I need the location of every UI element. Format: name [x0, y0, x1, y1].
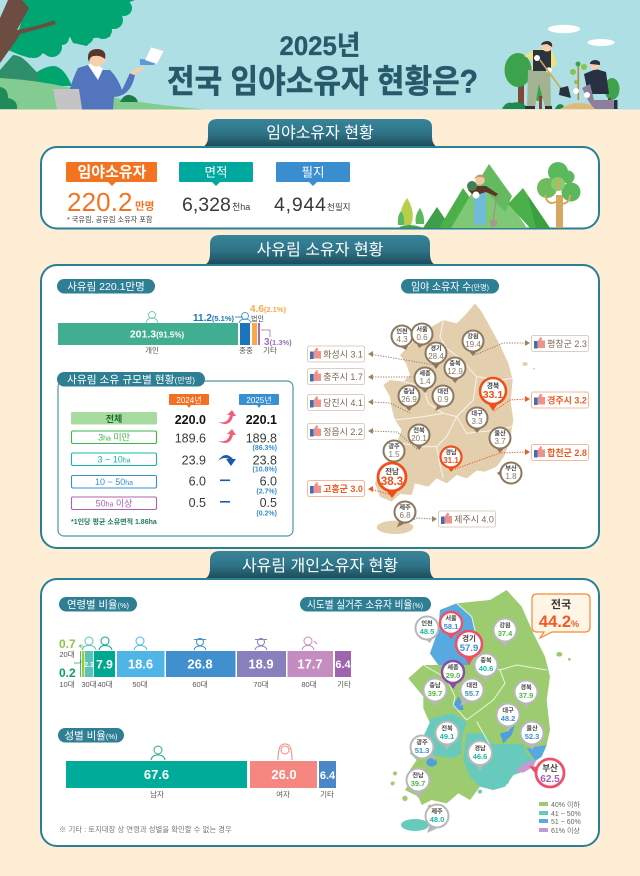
row: 50ha 이상: (0.2%): [256, 510, 277, 518]
pill: 사유림 소유 규모별 현황: 사유림 소유 규모별 현황 (만명): [67, 374, 195, 386]
pin: 광주 51.3: 광주: [416, 738, 428, 746]
bar chart: 연령별 비율: 18.6: [128, 656, 153, 672]
row: 10~50ha: [72, 474, 277, 496]
pin: 울산 52.3: [520, 722, 544, 750]
pin: 제주 48.0: [426, 804, 448, 833]
stacked bar: 사유림 소유자 구성: 4.6(2.1%): [250, 304, 286, 315]
stacked bar: 사유림 소유자 구성: 11.2(5.1%): [193, 313, 235, 324]
pin: 대전: [432, 386, 454, 411]
callout: 평창군 2.3: [532, 336, 588, 352]
row: 전체: 전체: [106, 413, 122, 424]
bar chart: 성별 비율: 여자: [276, 789, 290, 799]
bar chart: 성별 비율: 남자: [150, 790, 164, 799]
callout: 충주시 1.7: [308, 368, 364, 384]
pill: 연령별 비율: [59, 597, 137, 612]
section tab: 사유림 개인소유자 현황: 사유림 개인소유자 현황: [242, 557, 398, 575]
pin: 충북: [444, 358, 466, 383]
pin: 경북: 경북: [487, 381, 499, 390]
pin: 제주: [394, 502, 416, 527]
section tab: 임야소유자 현황: [203, 119, 437, 147]
icon: male: [151, 746, 165, 760]
callout: 고흥군 3.0: 고흥군 3.0: [323, 483, 363, 494]
pin: 세종: 세종: [419, 370, 431, 378]
note: 1인당 평균 소유면적: *1인당 평균 소유면적 1.86ha: [71, 517, 157, 526]
stat: 220.2만명: * 국유림, 공유림 소유자 포함: [67, 215, 153, 224]
bar chart: 연령별 비율: 6.4: [335, 659, 352, 671]
stat: 220.2만명: [67, 187, 154, 224]
pin: 울산 52.3: 52.3: [525, 732, 539, 741]
connector lines: [370, 343, 526, 527]
row: 전체: [71, 410, 277, 427]
header banner: [0, 0, 640, 110]
bar chart: 연령별 비율: 80대: [301, 680, 317, 689]
pin: 광주: 광주: [388, 442, 400, 450]
illustration: mountains and forester: [398, 162, 580, 228]
pin: 경북: 33.1: [483, 389, 503, 401]
pin: 충남 39.7: 39.7: [428, 689, 442, 698]
bar chart: 연령별 비율: 30대: [81, 680, 97, 689]
bar chart: 연령별 비율: 60대: [192, 680, 208, 689]
tag: 임야소유자: [66, 162, 157, 186]
tag: 면적: [179, 162, 253, 186]
pill: 성별 비율: 성별 비율(%): [64, 730, 118, 742]
stat: 4,944천필지: [274, 194, 350, 216]
icon: person 종중: [239, 312, 251, 323]
pill: 시도별 실거주 소유자 비율: 시도별 실거주 소유자 비율(%): [307, 599, 423, 611]
pin: 광주 51.3: 51.3: [415, 746, 429, 755]
stat: 220.2만명: 220.2: [67, 187, 132, 217]
pin: 충북 40.6: 충북: [480, 656, 492, 664]
pin: 충남: 충남: [403, 388, 415, 396]
pin: 전남 39.7: 전남: [412, 772, 424, 780]
pin: 충남 39.7: [424, 678, 446, 707]
illustration: tree planting people: [502, 25, 620, 109]
illustration: left hills and tree: [0, 0, 205, 110]
bar chart: 연령별 비율: 10대: [59, 680, 75, 689]
callout: 전국 44.2%: [532, 594, 590, 638]
bar chart: 연령별 비율: 2.3: [84, 662, 94, 669]
pin: 충북 40.6: [474, 654, 498, 682]
row: 3ha 미만: [72, 429, 277, 452]
pin: 경남 46.6: 46.6: [473, 752, 487, 761]
connector arrowheads: [368, 340, 530, 522]
tag: 면적: 면적: [204, 166, 228, 180]
callout: 제주시 4.0: 제주시 4.0: [454, 514, 494, 524]
row: 3~10ha: (10.8%): [252, 466, 277, 474]
pin: 부산 62.5: 62.5: [540, 774, 560, 785]
pin: 경기: 경기: [430, 344, 442, 352]
pin: 충남: [398, 386, 420, 411]
panel: 임야소유자 현황: [41, 147, 599, 228]
pin: 강원: [462, 330, 484, 356]
pin: 서울: 0.6: [416, 333, 428, 342]
pin: 전북: 20.1: [411, 434, 427, 443]
title: [167, 31, 478, 100]
row: 3ha 미만: 3ha 미만: [98, 432, 130, 442]
bar chart: 성별 비율: 26.0: [271, 767, 297, 782]
pin: 경기 57.9: [456, 631, 482, 665]
pin: 광주 51.3: [410, 736, 436, 761]
pin: 강원 37.4: 37.4: [498, 629, 513, 638]
pin: 경남: 31.1: [443, 456, 459, 465]
pin: 전북 49.1: 49.1: [440, 732, 454, 741]
stacked bar: 사유림 소유자 구성: 개인: [145, 345, 159, 355]
bar chart: 성별 비율: 기타: [320, 790, 334, 799]
row: 10~50ha: (2.7%): [256, 488, 277, 496]
table: 소유 규모별 현황: 2025년: [246, 395, 272, 405]
icon: person 개인: [146, 312, 158, 323]
pill: 사유림 220.1만명: 사유림 220.1만명: [67, 281, 145, 293]
pin: 대구 48.2: 48.2: [501, 714, 515, 723]
callout: 당진시 4.1: [308, 394, 364, 410]
pin: 전북 49.1: 전북: [441, 724, 453, 732]
pin: 제주 48.0: 48.0: [430, 815, 444, 824]
pin: 울산: 울산: [494, 430, 506, 438]
pin: 울산: [490, 428, 510, 453]
callout: 전국 44.2%: 44.2%: [539, 613, 579, 631]
row: 3~10ha: 23.8: [253, 454, 277, 468]
callout: 충주시 1.7: 충주시 1.7: [323, 372, 363, 382]
pin: 인천: [392, 326, 412, 350]
bar chart: 연령별 비율: [59, 637, 352, 689]
pin: 서울 58.1: 서울: [445, 614, 457, 622]
bar chart: 연령별 비율: 7.9: [96, 658, 113, 672]
pin: 제주: 제주: [399, 504, 411, 512]
pill: 임야 소유자 수: 임야 소유자 수(만명): [411, 280, 489, 293]
callout: 정읍시 2.2: 정읍시 2.2: [323, 427, 363, 437]
pin: 대구: [466, 408, 488, 433]
pin: 경남: [440, 446, 462, 472]
pin: 경남: 경남: [445, 448, 457, 456]
legend: 비율 구간: 40% 이하: [551, 800, 580, 809]
panel: 사유림 개인소유자 현황: [41, 579, 599, 846]
section tab: 임야소유자 현황: 임야소유자 현황: [266, 124, 374, 142]
pin: 세종: [414, 368, 436, 393]
pin: 충북: 12.9: [447, 367, 463, 376]
legend: 비율 구간: [539, 800, 581, 835]
pin: 세종 29.0: 29.0: [446, 671, 460, 680]
title: 2025년: [280, 31, 360, 61]
row: 3~10ha: 23.9: [182, 454, 206, 468]
section tab: 사유림 소유자 현황: [205, 235, 435, 265]
pin: 서울: 서울: [416, 326, 428, 334]
pin: 전북: 전북: [413, 426, 425, 434]
pin: 대전 55.7: 대전: [466, 682, 478, 690]
illustration: man with document and laptop: [53, 47, 164, 110]
pin: 광주: [384, 440, 404, 462]
bar chart: 성별 비율: 6.4: [320, 770, 336, 782]
bar chart: 연령별 비율: 17.7: [297, 656, 323, 672]
callout: 화성시 3.1: 화성시 3.1: [323, 350, 363, 360]
stacked bar: 사유림 소유자 구성: 3(1.3%): [264, 337, 292, 348]
bar chart: 연령별 비율: 0.2: [59, 666, 76, 680]
bar chart: 연령별 비율: 18.9: [248, 656, 274, 672]
pin: 인천: 4.3: [396, 335, 408, 344]
callout: 화성시 3.1: [308, 346, 364, 362]
callout: 경주시 3.2: [532, 392, 588, 408]
pin: 대구: 대구: [471, 410, 483, 418]
pin: 부산 62.5: 부산: [542, 763, 558, 773]
stat: 6,328천ha: 천ha: [232, 202, 250, 212]
pin: 경북: [480, 378, 506, 411]
pin: 인천: 인천: [396, 328, 408, 336]
pin: 경남 46.6: 경남: [474, 744, 486, 752]
note: 기타 설명: ※ 기타 : 토지대장 상 연령과 성별을 확인할 수 없는 경우: [59, 825, 232, 834]
pin: 서울 58.1: [440, 612, 462, 639]
row: 50ha 이상: 0.5: [260, 496, 277, 510]
pill: 사유림 220.1만명: [57, 279, 155, 294]
pin: 서울 58.1: 58.1: [444, 622, 458, 631]
row: 10~50ha: 10 ~ 50ha: [95, 477, 133, 487]
pin: 대전: 0.9: [437, 395, 449, 404]
callout: 경주시 3.2: 경주시 3.2: [547, 394, 587, 406]
pin: 강원 37.4: 강원: [499, 622, 511, 630]
pin: 서울: [412, 324, 432, 348]
bar chart: 연령별 비율: 70대: [253, 680, 269, 689]
pin: 전남 39.7: 39.7: [411, 779, 425, 788]
callout: 합천군 2.8: 합천군 2.8: [547, 447, 587, 458]
pin: 인천 48.5: [416, 616, 438, 643]
section tab: 사유림 개인소유자 현황: [205, 551, 435, 579]
pill: 사유림 소유 규모별 현황: [57, 372, 293, 536]
row: 10~50ha: 6.0: [189, 474, 206, 488]
pin: 대구 48.2: [496, 704, 520, 732]
bar chart: 연령별 비율: 40대: [97, 680, 113, 689]
bar chart: 연령별 비율: 50대: [132, 680, 148, 689]
stacked bar: 사유림 소유자 구성: 종중: [239, 346, 253, 355]
pin: 부산: [497, 462, 522, 484]
tag: 필지: [276, 162, 350, 186]
callout: 전국 44.2%: 전국: [551, 598, 571, 611]
pin: 강원: 19.4: [465, 340, 481, 349]
bar chart: 연령별 비율: 0.7: [59, 637, 76, 651]
row: 50ha 이상: 0.5: [189, 496, 206, 510]
pin: 강원: 강원: [467, 332, 479, 340]
legend: 비율 구간: 41 ~ 50%: [551, 811, 581, 818]
table: 소유 규모별 현황: [71, 394, 279, 526]
pin: 부산: 부산: [505, 464, 517, 472]
tag: 필지: 필지: [301, 166, 325, 180]
pin: 충남 39.7: 충남: [429, 682, 441, 690]
pin: 대전: 대전: [437, 388, 449, 396]
pill: 임야 소유자 수: [401, 279, 499, 294]
stacked bar: 사유림 소유자 구성: 법인: [251, 314, 264, 323]
pin: 광주: 1.5: [388, 450, 400, 459]
callout: 제주시 4.0: [438, 511, 496, 527]
row: 50ha 이상: 50ha 이상: [96, 498, 132, 508]
pin: 전남: 전남: [385, 466, 399, 476]
pin: 전남 39.7: [406, 768, 430, 798]
title: 전국 임야소유자 현황은?: [167, 64, 478, 100]
pin: 강원 37.4: [494, 618, 516, 648]
pin: 제주 48.0: 제주: [431, 808, 443, 816]
pill: 성별 비율: [58, 728, 124, 742]
section tab: 사유림 소유자 현황: 사유림 소유자 현황: [257, 241, 384, 259]
row: 3ha 미만: (86.3%): [252, 445, 277, 452]
pin: 경기: [426, 342, 446, 369]
table: 소유 규모별 현황: 2024년: [176, 395, 202, 405]
row: 전체: 220.0: [175, 413, 206, 427]
stacked bar: 사유림 소유자 구성: 기타: [263, 346, 277, 355]
stat: 6,328천ha: 6,328: [182, 194, 231, 216]
row: 3ha 미만: 189.8: [246, 432, 277, 446]
callout: 평창군 2.3: 평창군 2.3: [547, 339, 587, 349]
bar chart: 성별 비율: 67.6: [144, 767, 169, 782]
bar chart: 성별 비율: [66, 761, 336, 799]
pin: 충북: 충북: [449, 360, 461, 368]
row: 전체: 220.1: [246, 413, 277, 427]
pin: 충남: 26.9: [401, 395, 417, 404]
pin: 전북: [408, 424, 430, 450]
row: 3~10ha: [72, 453, 277, 474]
callout: 고흥군 3.0: [308, 480, 364, 496]
pin: 전북 49.1: [436, 722, 458, 750]
icon: female: [278, 744, 292, 760]
pin: 대구: 3.3: [471, 417, 483, 426]
pin: 인천 48.5: 인천: [421, 620, 433, 628]
pin: 경남 46.6: [468, 741, 492, 771]
callout: 합천군 2.8: [532, 444, 588, 460]
pin: 경기 57.9: 경기: [462, 633, 476, 643]
pin: 부산 62.5: [529, 759, 564, 787]
row: 3~10ha: 3 ~ 10ha: [97, 454, 131, 464]
pin: 대전 55.7: [460, 678, 484, 706]
pin: 부산: 1.8: [505, 472, 517, 481]
pin: 경기: 28.4: [428, 352, 444, 361]
row: 3ha 미만: 189.6: [175, 432, 206, 446]
stacked bar: 사유림 소유자 구성: [58, 304, 292, 355]
pin: 인천 48.5: 48.5: [420, 627, 434, 636]
bar chart: 연령별 비율: 기타: [337, 680, 351, 689]
row: 10~50ha: 6.0: [260, 474, 277, 488]
pin: 경기 57.9: 57.9: [460, 643, 478, 654]
map: 시도별 실거주 소유자 비율: [391, 590, 571, 833]
icons: age group people: [82, 637, 317, 650]
stat: 4,944천필지: 천필지: [327, 202, 350, 212]
pin: 전남: [378, 463, 406, 498]
pin: 세종 29.0: 세종: [447, 664, 459, 672]
map: 시도별 임야 소유자 수: [308, 303, 588, 534]
stat: 4,944천필지: 4,944: [274, 194, 326, 216]
pin: 충북 40.6: 40.6: [479, 664, 493, 673]
pin: 울산: 3.7: [494, 437, 506, 446]
stat: 220.2만명: 만명: [135, 200, 154, 212]
pin: 경북 37.9: [514, 680, 538, 709]
pin: 경북 37.9: 경북: [520, 684, 532, 692]
pin: 대구 48.2: 대구: [502, 706, 514, 714]
callout: 당진시 4.1: 당진시 4.1: [323, 398, 363, 408]
legend: 비율 구간: 61% 이상: [551, 826, 580, 835]
pin: 전남: 38.3: [381, 476, 403, 488]
pin: 제주: 6.8: [399, 511, 411, 520]
pin: 경북 37.9: 37.9: [519, 691, 533, 700]
pill: 연령별 비율: 연령별 비율(%): [67, 599, 129, 611]
bar chart: 연령별 비율: 26.8: [187, 656, 213, 672]
tag: 임야소유자: 임야소유자: [77, 164, 147, 181]
row: 50ha 이상: [72, 496, 277, 518]
pin: 대전 55.7: 55.7: [465, 689, 479, 698]
bar chart: 연령별 비율: 20대: [59, 650, 75, 659]
pin: 울산 52.3: 울산: [526, 724, 538, 732]
legend: 비율 구간: 51 ~ 60%: [551, 819, 581, 826]
callout: 정읍시 2.2: [308, 424, 364, 440]
panel: 사유림 소유자 현황: [41, 265, 599, 548]
pin: 세종: 1.4: [419, 377, 431, 386]
stacked bar: 사유림 소유자 구성: 201.3(91.5%): [130, 328, 184, 340]
pin: 세종 29.0: [442, 661, 464, 689]
